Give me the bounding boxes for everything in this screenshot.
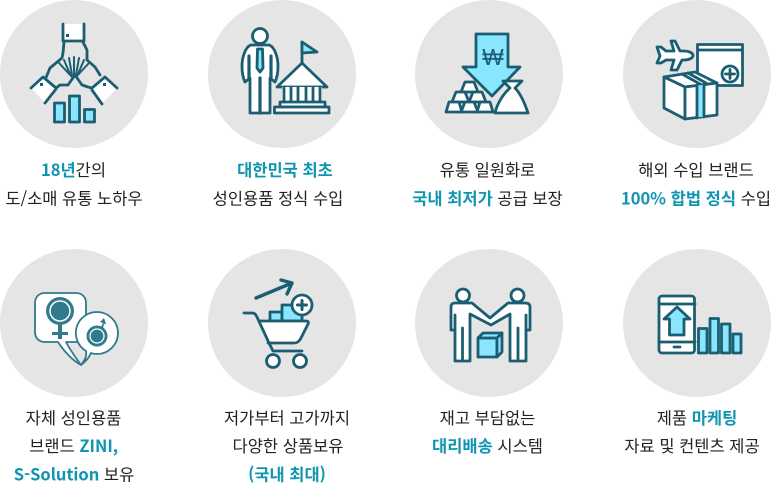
icon: won arrow, gold and bag: ₩ (482, 44, 504, 70)
panel: marketing materials (623, 249, 771, 457)
caption: 제품 마케팅 (657, 405, 737, 429)
icon: gender speech bubbles (35, 293, 118, 365)
caption: 도/소매 유통 노하우 (5, 186, 143, 210)
caption: S-Solution 보유 (14, 462, 134, 486)
caption: 유통 일원화로 (440, 157, 535, 181)
caption: 다양한 상품보유 (233, 433, 343, 457)
caption (5, 157, 143, 210)
icon: phone with arrow and bars (659, 296, 741, 353)
background circle (208, 249, 356, 397)
caption: 저가부터 고가까지 (224, 405, 350, 429)
panel: own brand (0, 249, 148, 486)
caption (14, 405, 134, 486)
background circle (623, 0, 771, 148)
panel: drop shipping (415, 249, 563, 457)
caption: 재고 부담없는 (440, 405, 535, 429)
caption (624, 405, 760, 457)
caption: 대한민국 최초 (237, 157, 333, 181)
background circle (415, 0, 563, 148)
caption: 대리배송 시스템 (432, 433, 543, 457)
caption: 국내 최저가 공급 보장 (412, 186, 563, 210)
caption: 자체 성인용품 (26, 405, 121, 429)
background circle (0, 249, 148, 397)
caption (213, 157, 343, 210)
panel: 18 years know-how (0, 0, 148, 210)
background circle (0, 0, 148, 148)
panel: first in Korea (208, 0, 356, 210)
caption: 18년간의 (41, 157, 106, 181)
caption (412, 157, 563, 210)
background circle (415, 249, 563, 397)
caption: 100% 합법 정식 수입 (621, 186, 771, 210)
icon: two people and box (451, 289, 530, 361)
caption: 자료 및 컨텐츠 제공 (624, 433, 760, 457)
background circle (208, 0, 356, 148)
background circle (623, 249, 771, 397)
caption: 성인용품 정식 수입 (213, 186, 343, 210)
panel: lowest price (412, 0, 563, 210)
icon: won arrow, gold and bag (446, 34, 528, 113)
icon: shopping cart with arrow (244, 280, 312, 368)
panel: overseas brands (621, 0, 771, 210)
icon: plane, window and box (657, 41, 742, 119)
caption: 브랜드 ZINI, (29, 433, 118, 457)
icon: joined hands and bars (31, 24, 117, 122)
caption: (국내 최대) (248, 462, 326, 486)
panel: wide product range (208, 249, 356, 486)
caption (621, 157, 771, 210)
caption (432, 405, 543, 457)
caption (224, 405, 350, 486)
icon: man and building (242, 28, 329, 113)
caption: 해외 수입 브랜드 (638, 157, 754, 181)
